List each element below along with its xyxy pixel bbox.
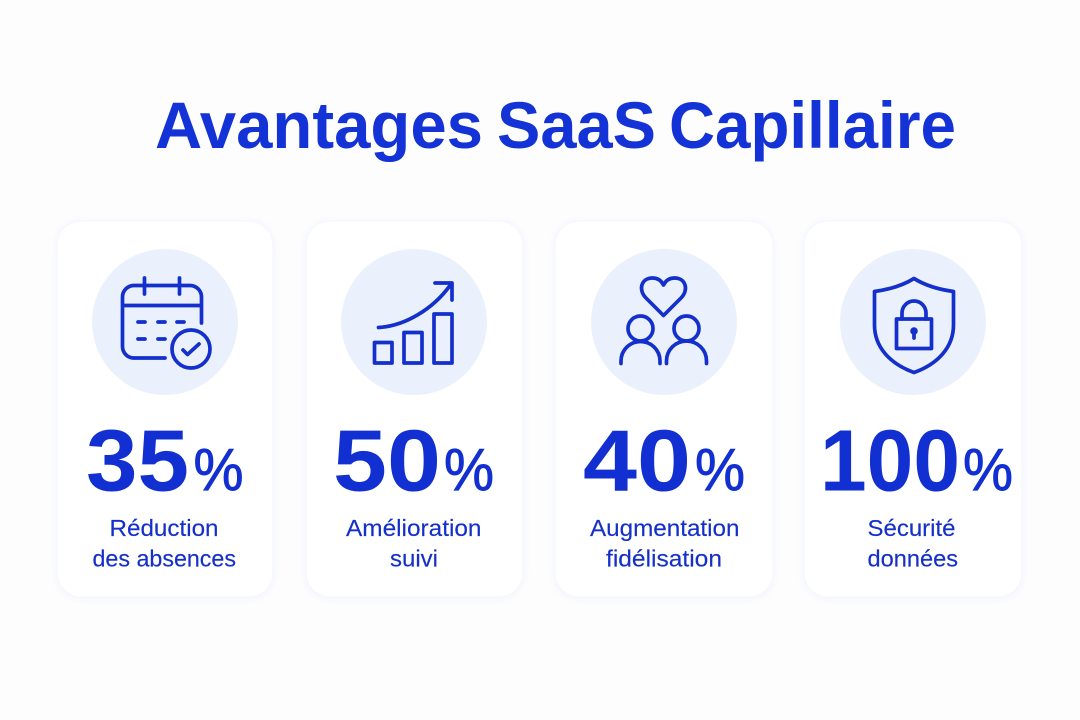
panel: sécurité données [804,221,1022,597]
stat: 50% [333,412,494,510]
stat: 40%: 40 [583,412,691,510]
panel: réduction des absences [57,221,273,597]
stat: 100%: 100 [820,412,960,510]
stat: 100%: % [963,437,1013,503]
icon: shield with padlock [840,249,986,395]
label: amélioration suivi: suivi [390,546,438,572]
label: réduction des absences: des absences [92,546,236,572]
stat: 35%: 35 [86,412,189,510]
stat: 50%: % [444,437,494,503]
panel: amélioration suivi [306,221,523,597]
label: amélioration suivi [346,515,482,572]
stat: 35%: % [194,437,244,503]
stat: 40%: % [695,437,745,503]
label: sécurité données: Sécurité [868,515,956,541]
label: sécurité données: données [868,546,958,572]
stat: 50%: 50 [333,412,441,510]
icon: calendar with check [92,249,238,395]
panel: augmentation fidélisation [555,221,773,597]
stat: 40% [583,412,745,510]
icon: growth chart [341,249,487,395]
title: Avantages [155,88,483,162]
label: amélioration suivi: Amélioration [346,515,482,541]
label: sécurité données [868,515,958,572]
title: Capillaire [669,88,956,162]
icon: two people and heart [591,249,737,395]
label: augmentation fidélisation: fidélisation [606,546,722,572]
stat: 35% [86,412,244,510]
title [155,88,956,162]
label: augmentation fidélisation: Augmentation [590,515,740,541]
title: SaaS [497,88,656,162]
label: augmentation fidélisation [590,515,740,572]
label: réduction des absences [92,515,236,572]
label: réduction des absences: Réduction [110,515,218,541]
